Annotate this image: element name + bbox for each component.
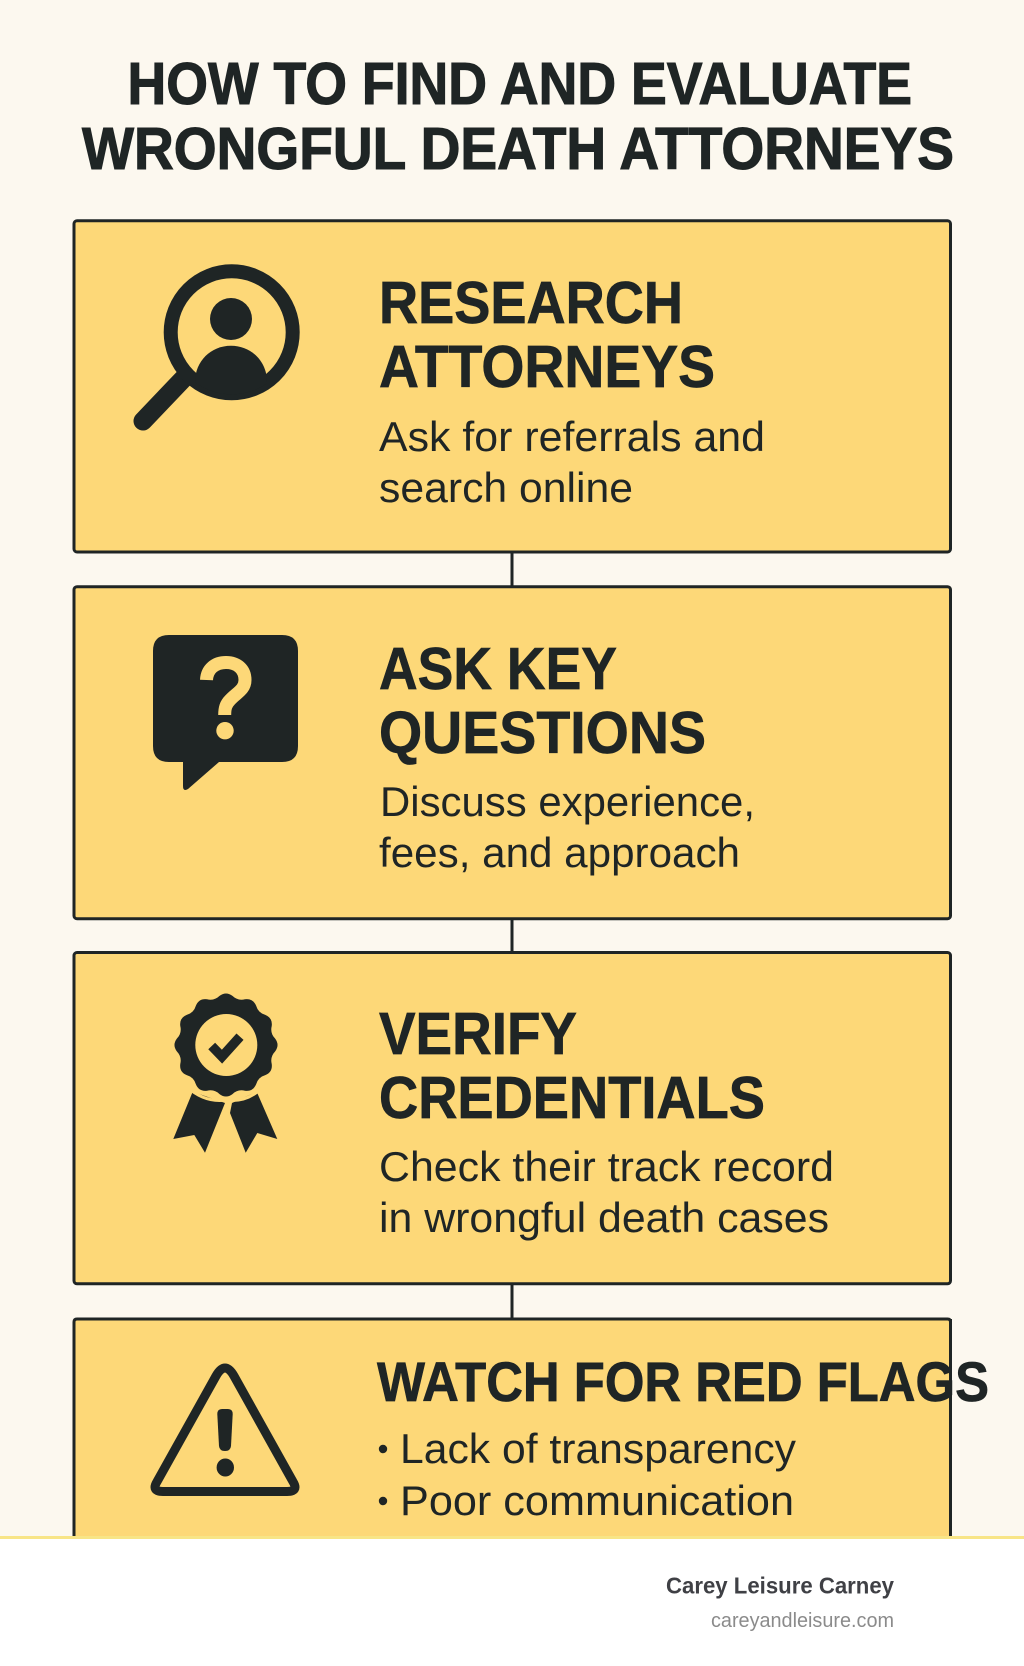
- heading: verify credentials: CREDENTIALS: [379, 1065, 765, 1131]
- connector: step 1 to step 2: [510, 552, 514, 587]
- panel: watch for red flags: [74, 1319, 989, 1537]
- text: questions description: fees, and approach: [379, 829, 740, 876]
- title: WRONGFUL DEATH ATTORNEYS: [82, 116, 954, 182]
- text: research description: search online: [379, 464, 633, 511]
- icon: warning triangle: [155, 1368, 295, 1492]
- icon: speech bubble with question mark: [153, 635, 298, 790]
- footer: [0, 1536, 1024, 1666]
- text: questions description: Discuss experience,: [380, 778, 755, 825]
- icon: award ribbon with check: [173, 993, 278, 1153]
- heading: research attorneys: ATTORNEYS: [379, 334, 715, 400]
- connector: step 2 to step 3: [510, 918, 514, 953]
- text: credentials description: Check their track record: [379, 1143, 834, 1190]
- heading: verify credentials: VERIFY: [379, 1001, 577, 1067]
- footer brand name: Carey Leisure Carney: [666, 1572, 894, 1598]
- icon: magnifying glass with person: [143, 271, 293, 421]
- text: research description: Ask for referrals and: [379, 413, 765, 460]
- text: credentials description: [379, 1143, 834, 1241]
- heading: verify credentials: [379, 1001, 765, 1131]
- list: red flag bullets: Poor communication: [400, 1477, 794, 1524]
- footer website: careyandleisure.com: [711, 1610, 894, 1632]
- heading: ask key questions: ASK KEY: [379, 636, 617, 702]
- heading: ask key questions: [379, 636, 706, 766]
- connector: step 3 to step 4: [510, 1283, 514, 1319]
- text: questions description: [379, 778, 755, 876]
- title: [82, 51, 954, 182]
- text: credentials description: in wrongful death cases: [379, 1194, 829, 1241]
- panel: ask key questions: [74, 587, 950, 919]
- panel: research attorneys: [74, 221, 950, 552]
- heading: research attorneys: [379, 270, 715, 400]
- title: HOW TO FIND AND EVALUATE: [128, 51, 912, 117]
- list: red flag bullets: [379, 1425, 796, 1524]
- list: red flag bullets: Lack of transparency: [400, 1425, 796, 1472]
- panel: verify credentials: [74, 952, 950, 1284]
- heading: research attorneys: RESEARCH: [379, 270, 683, 336]
- heading: ask key questions: QUESTIONS: [379, 700, 706, 766]
- text: research description: [379, 413, 765, 511]
